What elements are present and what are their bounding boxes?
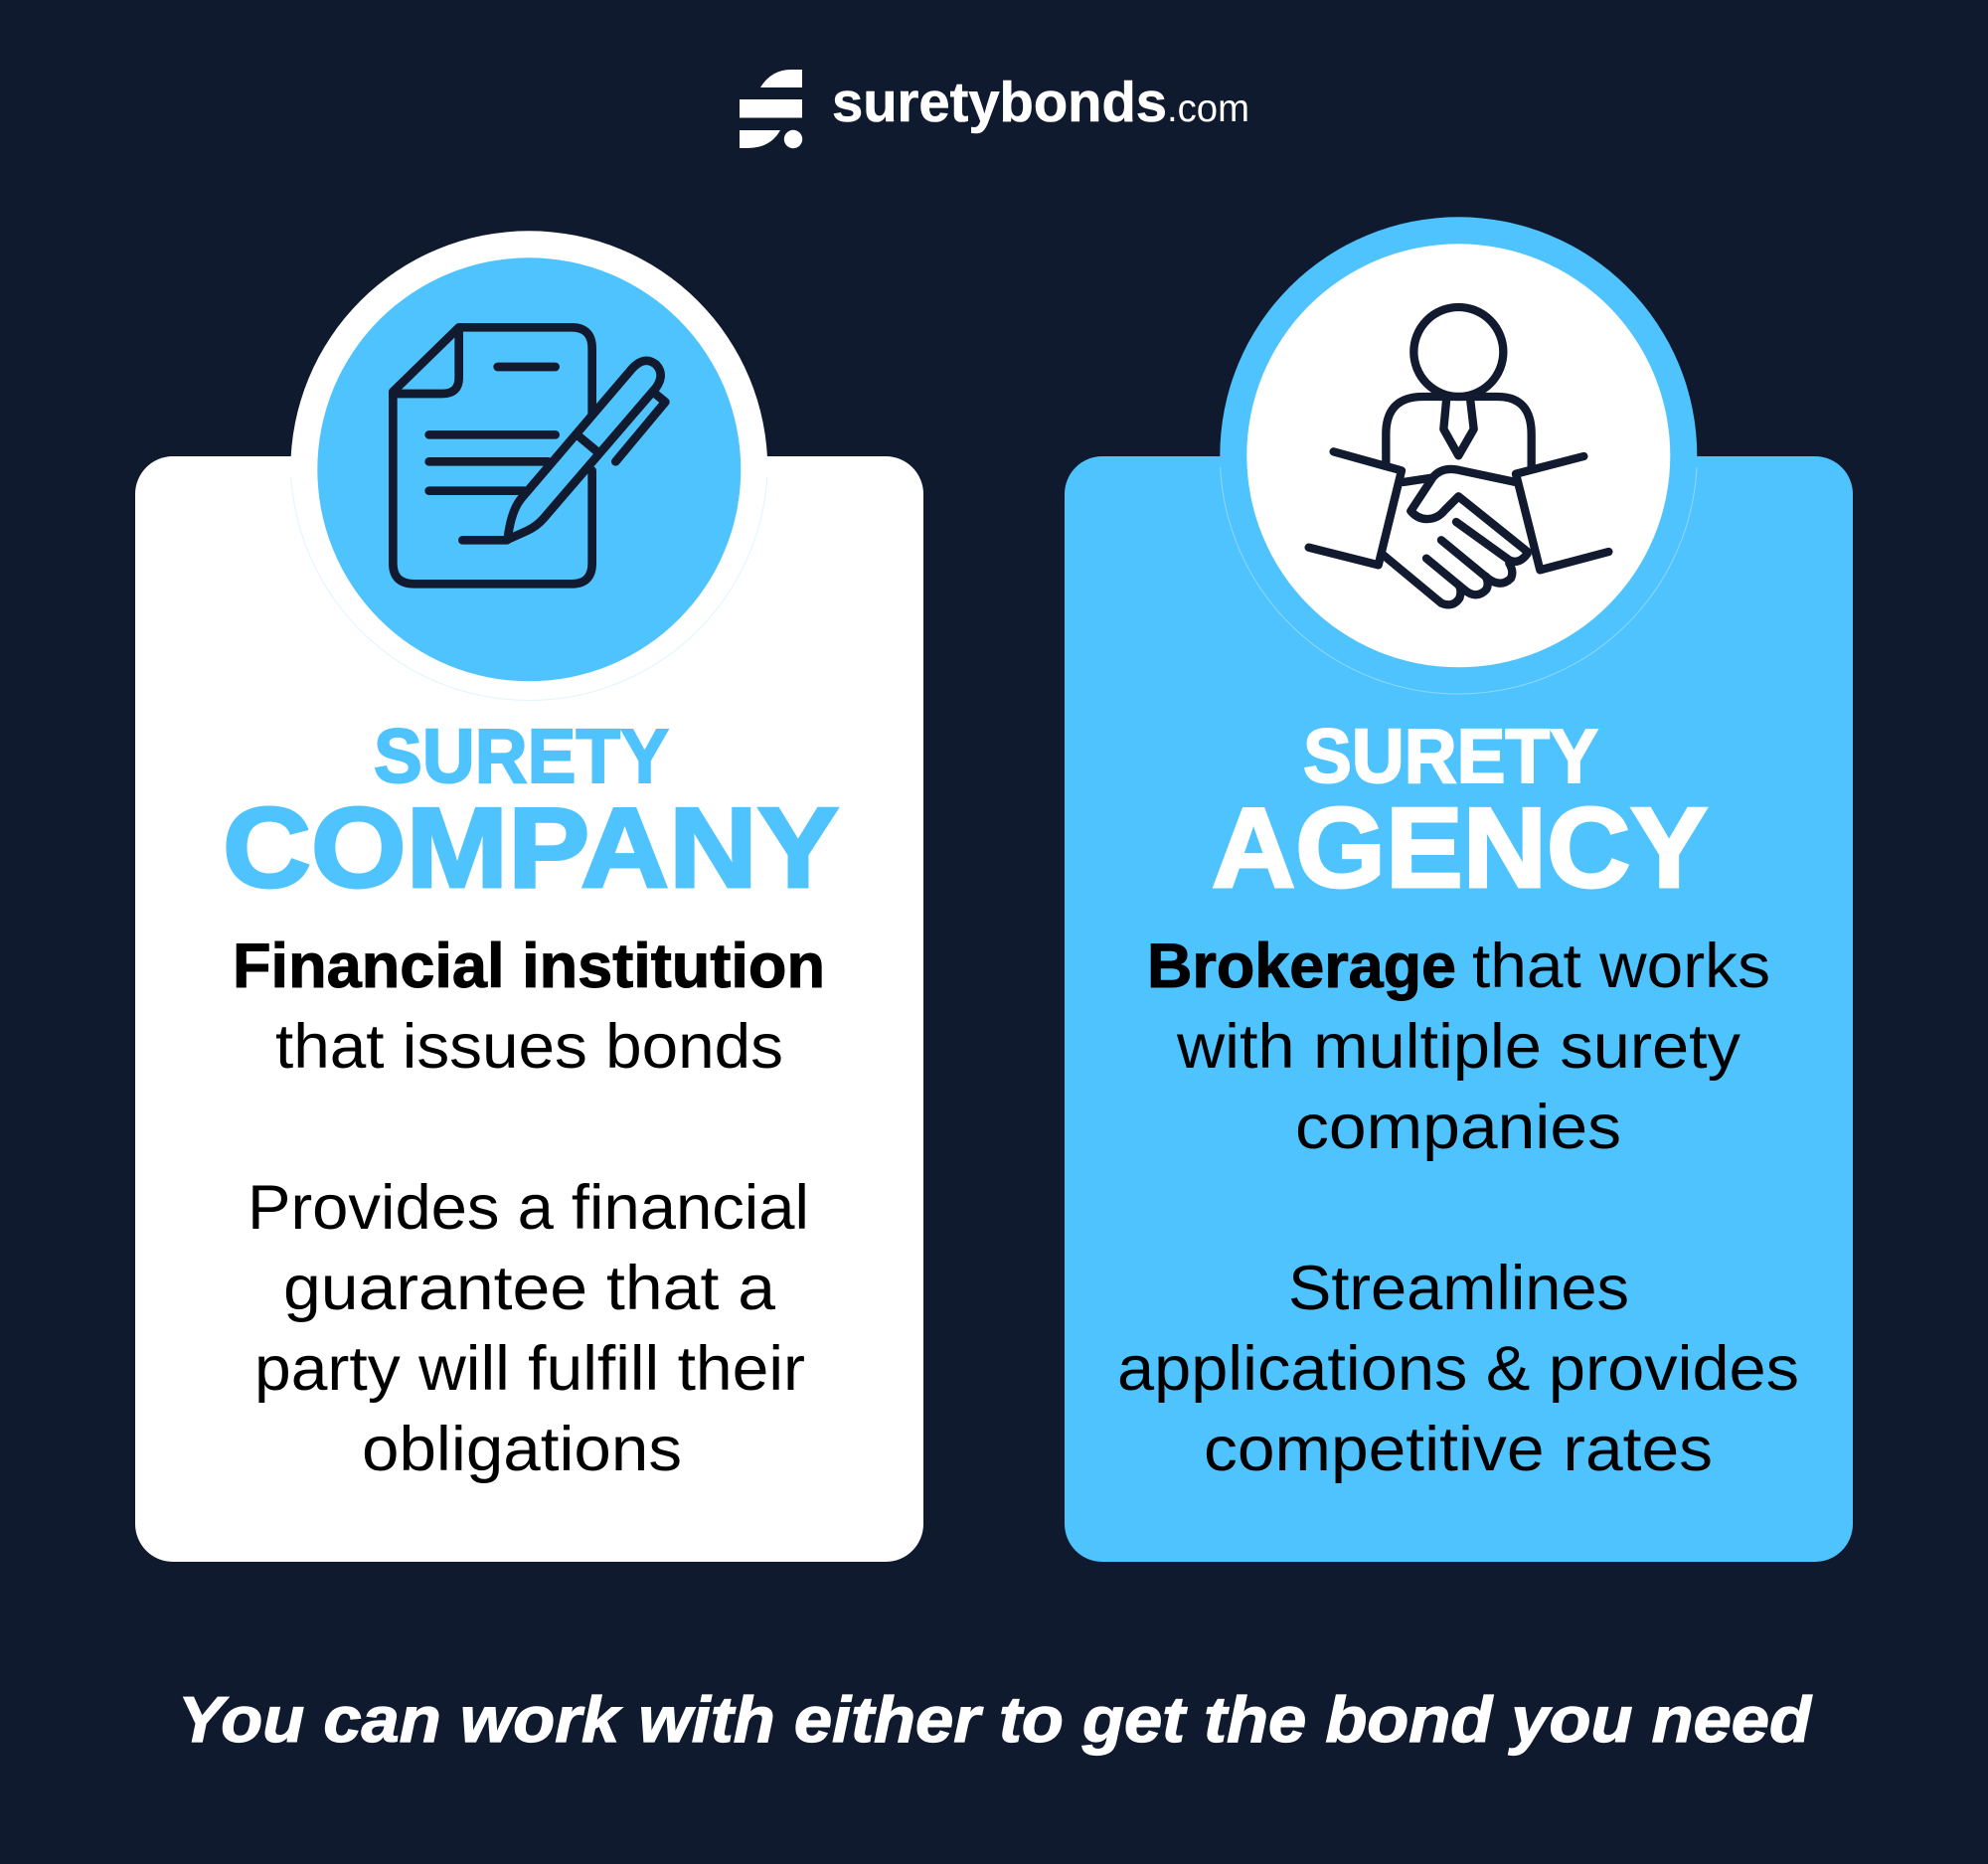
icon circle: document and pen <box>290 231 767 708</box>
text: role: applications & provides <box>1117 1334 1799 1404</box>
heading: surety company: COMPANY <box>223 785 839 912</box>
text: role: obligations <box>362 1415 682 1484</box>
text: definition <box>1147 932 1770 1162</box>
heading: surety company: SURETY <box>374 714 669 799</box>
text: role: guarantee that a <box>283 1254 776 1323</box>
heading: surety agency <box>1212 714 1708 912</box>
text: definition <box>233 932 825 1082</box>
text: role: Provides a financial <box>248 1173 809 1243</box>
panel: surety agency <box>1065 217 1853 1562</box>
text: role: competitive rates <box>1204 1415 1713 1484</box>
text: definition: that issues bonds <box>275 1012 783 1082</box>
icon circle: businessperson handshake <box>1220 217 1697 694</box>
heading: surety agency: AGENCY <box>1212 785 1708 912</box>
text: definition: Brokerage <box>1147 932 1456 1001</box>
panel: surety company <box>135 231 923 1562</box>
footer callout: You can work with either to get the bond you need <box>178 1683 1812 1756</box>
card background <box>1065 456 1853 1562</box>
text: role <box>248 1173 809 1484</box>
icon: suretybonds mark <box>740 70 802 148</box>
heading: surety company <box>223 714 839 912</box>
text: definition: companies <box>1295 1093 1621 1162</box>
heading: surety agency: SURETY <box>1303 714 1598 799</box>
text: definition: that works <box>1472 932 1770 1001</box>
text: definition: with multiple surety <box>1176 1012 1741 1082</box>
logo wordmark: suretybonds.com <box>832 71 1249 134</box>
text: definition: Financial institution <box>233 932 825 1001</box>
text: role <box>1117 1254 1799 1484</box>
text: role: Streamlines <box>1288 1254 1629 1323</box>
text: role: party will fulfill their <box>254 1334 805 1404</box>
card background <box>135 456 923 1562</box>
logo: suretybonds.com <box>740 70 1249 148</box>
